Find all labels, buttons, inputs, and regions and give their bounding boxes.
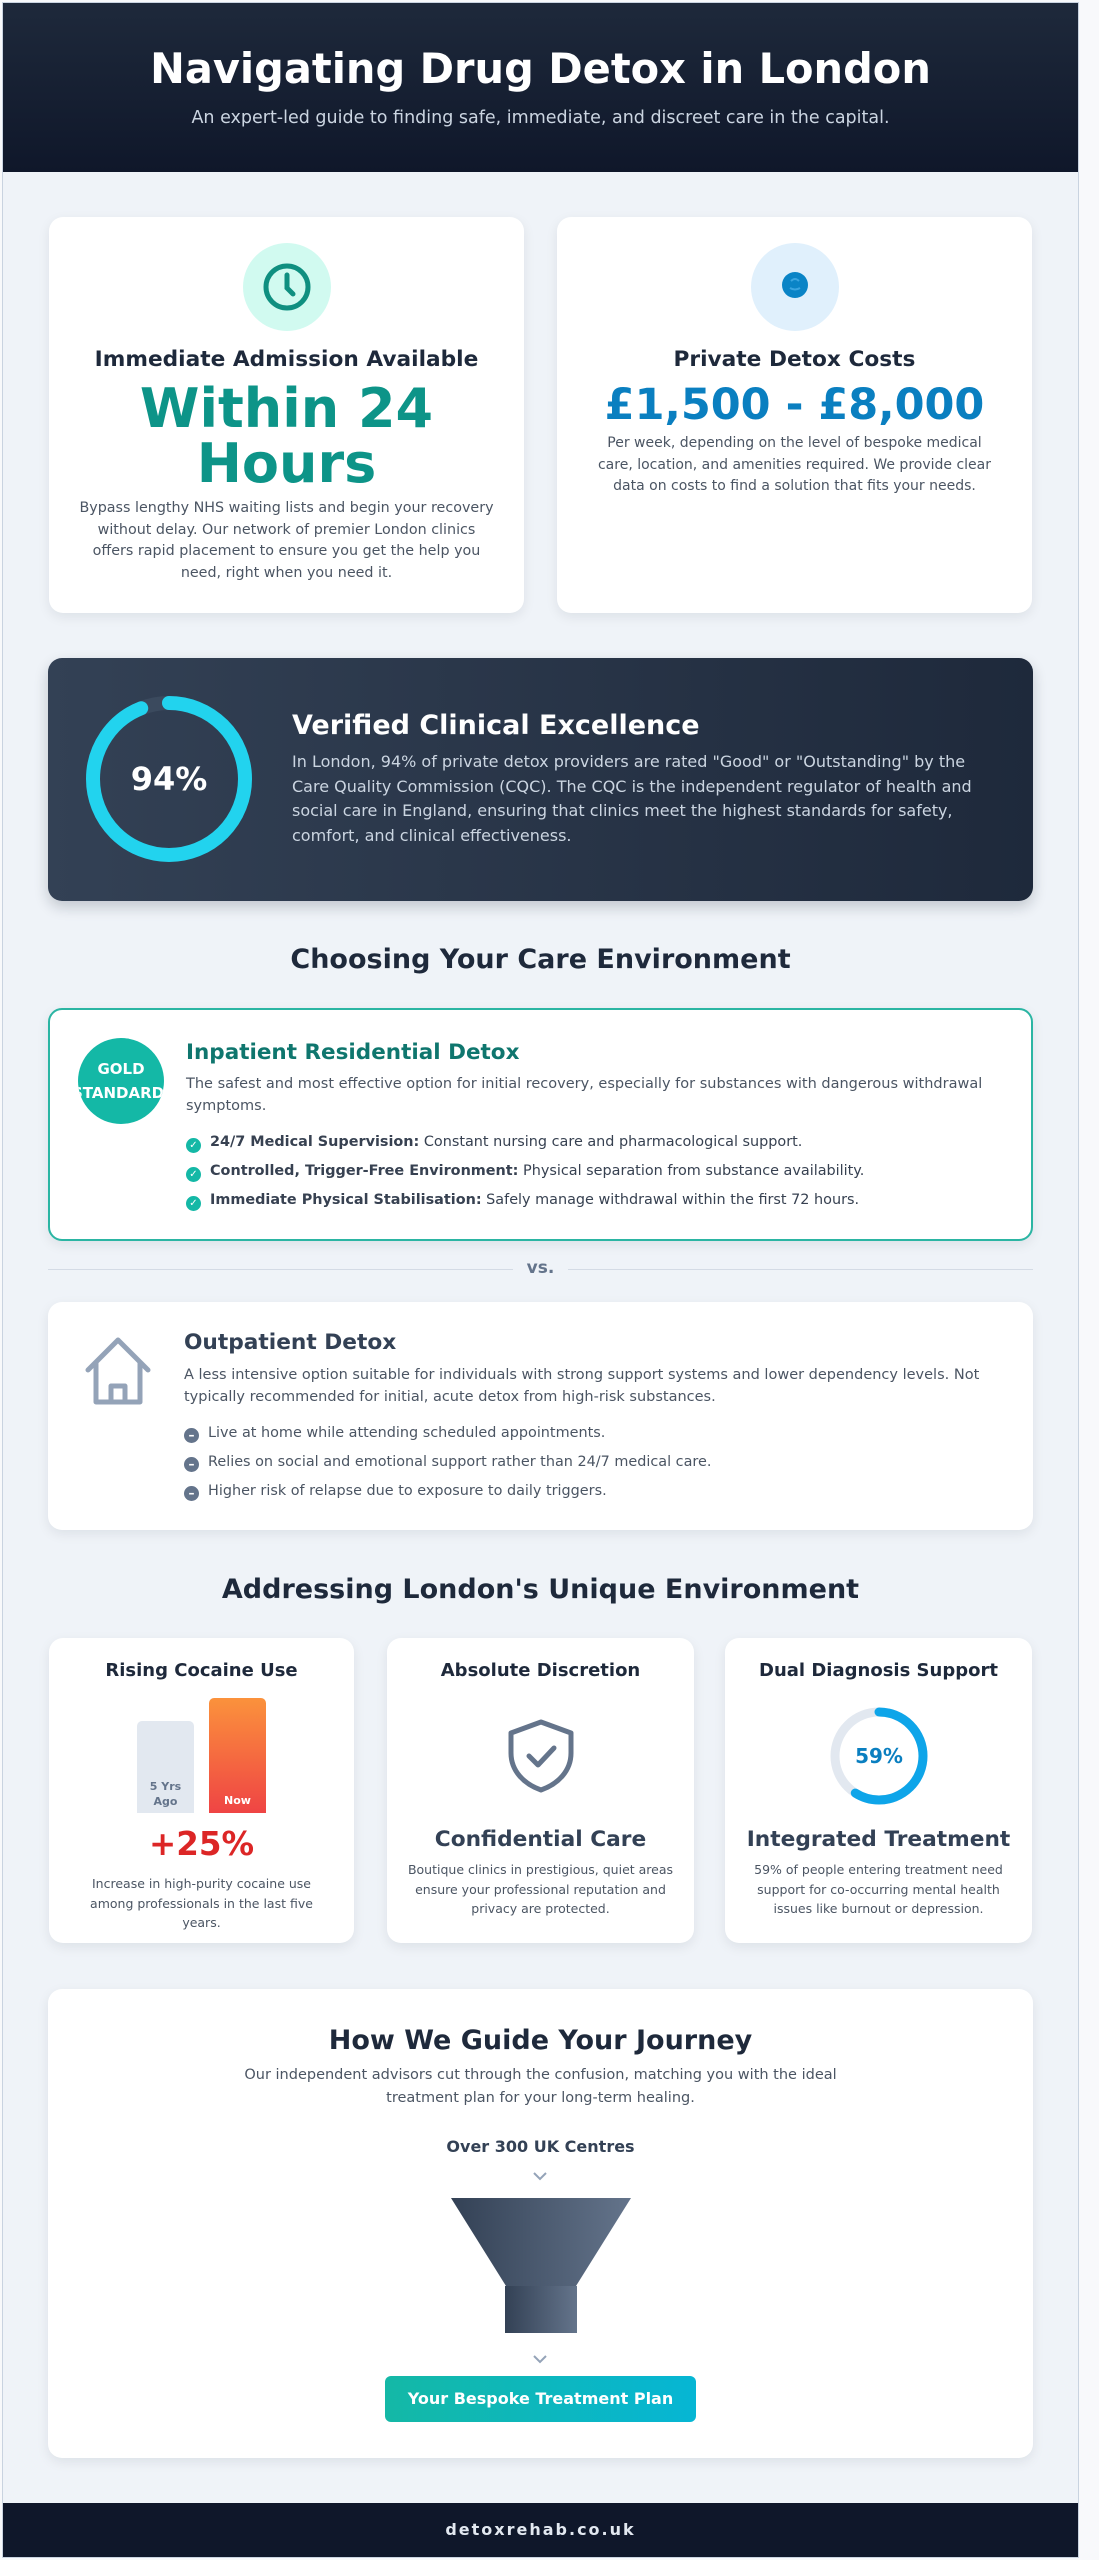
text: The safest and most effective option for initial recovery, especially for substances with dangerous withdrawal symptoms. <box>186 1076 982 1114</box>
stat: £1,500 - £8,000 <box>605 380 984 430</box>
ring chart 94% <box>86 696 252 862</box>
stat: Hours <box>197 432 376 495</box>
bullet list: Relies on social and emotional support rather than 24/7 medical care. <box>208 1454 711 1470</box>
bar chart <box>137 1698 266 1813</box>
badge: gold standard <box>78 1038 164 1124</box>
footer <box>3 2503 1078 2557</box>
text: Bypass lengthy NHS waiting lists and begin your recovery without delay. Our network of premier London clinics offers rapid placement to ensure you get the help you need, right when you need it. <box>79 500 494 580</box>
bullet list: Live at home while attending scheduled appointments. <box>208 1425 605 1441</box>
bullet list <box>186 1134 864 1211</box>
stat: +25% <box>149 1825 254 1863</box>
ring chart 59% <box>830 1708 928 1804</box>
text: Per week, depending on the level of bespoke medical care, location, and amenities required. We provide clear data on costs to find a solution that fits your needs. <box>598 435 991 494</box>
label: centres: Over 300 UK Centres <box>446 2137 635 2156</box>
section heading: care environment: Choosing Your Care Environment <box>290 944 791 975</box>
bullet list: – <box>188 1428 194 1442</box>
card: discretion <box>387 1638 694 1943</box>
icon: shield <box>508 1720 574 1792</box>
text: A less intensive option suitable for individuals with strong support systems and lower dependency levels. Not typically recommended for initial, acute detox from high-risk substances. <box>184 1367 979 1405</box>
vs divider: vs. <box>527 1258 554 1278</box>
bar chart: 5 Yrs <box>150 1780 181 1793</box>
bullet list: Higher risk of relapse due to exposure to daily triggers. <box>208 1483 607 1499</box>
bullet list: Immediate Physical Stabilisation: Safely manage withdrawal within the first 72 hours. <box>210 1192 859 1208</box>
heading: Absolute Discretion <box>441 1660 640 1681</box>
ring chart 59%: 59% <box>855 1744 903 1768</box>
section heading: london environment: Addressing London's Unique Environment <box>222 1574 859 1605</box>
icon: coins <box>751 243 839 331</box>
ring chart 94%: 94% <box>131 760 207 798</box>
text: 59% of people entering treatment need support for co-occurring mental health issues like burnout or depression. <box>754 1862 1003 1916</box>
heading: Dual Diagnosis Support <box>759 1660 998 1681</box>
bullet list: ✓ <box>189 1169 198 1180</box>
heading: Inpatient Residential Detox <box>186 1040 519 1065</box>
title: Navigating Drug Detox in London <box>150 44 931 93</box>
heading: Immediate Admission Available <box>95 347 478 372</box>
panel: clinical excellence <box>48 658 1033 901</box>
icon: clock <box>243 243 331 331</box>
button: treatment plan: Your Bespoke Treatment Plan <box>408 2389 673 2408</box>
stat <box>140 377 433 495</box>
text: Increase in high-purity cocaine use among professionals in the last five years. <box>90 1876 313 1930</box>
bullet list: – <box>188 1457 194 1471</box>
button: treatment plan <box>385 2376 696 2422</box>
panel: journey <box>48 1989 1033 2458</box>
bullet list: ✓ <box>189 1198 198 1209</box>
heading: How We Guide Your Journey <box>329 2025 752 2056</box>
bullet list: Controlled, Trigger-Free Environment: Physical separation from substance availability. <box>210 1163 864 1179</box>
heading: Rising Cocaine Use <box>105 1660 298 1681</box>
bullet list <box>184 1425 711 1501</box>
icon: house <box>86 1338 150 1404</box>
text: Our independent advisors cut through the confusion, matching you with the ideal treatment plan for your long-term healing. <box>244 2067 837 2106</box>
stat: Within 24 <box>140 377 433 440</box>
text: In London, 94% of private detox providers are rated "Good" or "Outstanding" by the Care Quality Commission (CQC). The CQC is the independent regulator of health and social care in England, ensuring that clinics meet the highest standards for safety, comfort, and clinical effectiveness. <box>292 752 972 844</box>
subtitle: An expert-led guide to finding safe, immediate, and discreet care in the capital. <box>191 108 890 128</box>
heading: Confidential Care <box>435 1827 646 1852</box>
card: dual diagnosis <box>725 1638 1032 1943</box>
arrow down <box>533 2172 547 2180</box>
footer: detoxrehab.co.uk <box>445 2520 636 2539</box>
panel: outpatient <box>48 1302 1033 1530</box>
text: Boutique clinics in prestigious, quiet areas ensure your professional reputation and privacy are protected. <box>408 1862 673 1916</box>
card: costs <box>557 217 1032 613</box>
heading: Outpatient Detox <box>184 1330 396 1355</box>
panel: inpatient <box>48 1008 1033 1241</box>
heading: Private Detox Costs <box>674 347 915 372</box>
header <box>3 3 1078 172</box>
bar chart: Ago <box>154 1795 177 1808</box>
card: cocaine use <box>49 1638 354 1943</box>
heading: Integrated Treatment <box>747 1827 1010 1852</box>
bullet list: – <box>188 1486 194 1500</box>
arrow down <box>533 2355 547 2364</box>
bullet list: ✓ <box>189 1140 198 1151</box>
heading: Verified Clinical Excellence <box>292 710 700 741</box>
bar chart: Now <box>224 1794 251 1807</box>
card: immediate admission <box>49 217 524 613</box>
bullet list: 24/7 Medical Supervision: Constant nursing care and pharmacological support. <box>210 1134 802 1150</box>
badge: gold standard: GOLD <box>97 1060 145 1078</box>
funnel <box>451 2198 631 2333</box>
